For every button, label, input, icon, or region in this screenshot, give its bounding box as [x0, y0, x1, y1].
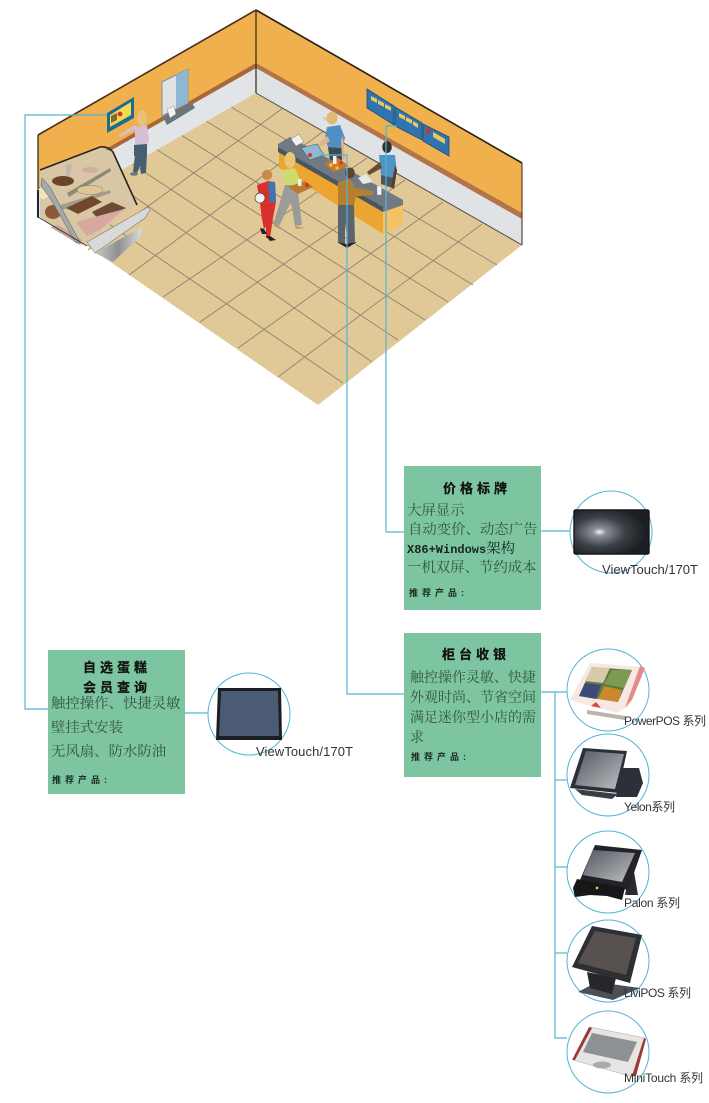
service counter [278, 134, 403, 234]
price board screens [367, 89, 449, 156]
right cashier [367, 141, 397, 189]
pastry panel features: 无风扇、防水防油 [51, 743, 166, 760]
panel: pastry self-service and member lookup [48, 650, 185, 794]
wall menu screen [107, 97, 134, 133]
pastry display case [37, 147, 150, 262]
product: ViewTouch 170T for pastry [208, 673, 353, 759]
product: Palon: Palon 系列 [624, 896, 680, 910]
product: MiniTouch: MiniTouch 系列 [624, 1071, 703, 1085]
counter checkout features [410, 669, 536, 746]
recommended products label: 推荐产品: [409, 587, 468, 598]
heading: pastry and member lookup [83, 660, 151, 695]
product: ViewTouch 170T for pastry: ViewTouch/170T [256, 744, 353, 759]
heading: pastry and member lookup: 自选蛋糕 [83, 660, 151, 675]
pastry panel features: 触控操作、快捷灵敏 [51, 695, 181, 712]
product: LiviPOS [567, 920, 691, 1002]
counter checkout features: 外观时尚、节省空间 [410, 689, 536, 706]
customer at counter [337, 168, 373, 248]
isometric shop scene [37, 10, 522, 405]
pastry panel features [51, 695, 181, 760]
price signage features: 自动变价、动态广告 [408, 521, 538, 538]
product: Palon [567, 831, 680, 913]
left wall [38, 10, 256, 218]
heading: pastry and member lookup: 会员查询 [83, 680, 151, 695]
drinks window and shelf [162, 69, 195, 125]
heading: counter checkout: 柜台收银 [442, 647, 510, 662]
recommended products label: 推荐产品: [411, 751, 470, 762]
product: PowerPOS: PowerPOS 系列 [624, 714, 706, 728]
connector lines [25, 115, 570, 1038]
right wall [256, 10, 522, 245]
product: ViewTouch 170T for price board: ViewTouch/170T [602, 562, 698, 577]
pastry panel features: 壁挂式安装 [51, 719, 123, 736]
product: LiviPOS: LiviPOS 系列 [624, 986, 691, 1000]
product: Yelon: Yelon系列 [624, 800, 675, 814]
counter checkout features: 满足迷你型小店的需 [410, 709, 536, 726]
floor [38, 93, 522, 405]
price signage features: 一机双屏、节约成本 [407, 558, 537, 576]
product: MiniTouch [567, 1011, 703, 1093]
heading: price signage: 价格标牌 [443, 481, 511, 496]
customer at wall screen [119, 110, 149, 176]
price signage features: 大屏显示 [407, 502, 465, 519]
woman with tray [274, 152, 313, 229]
product: PowerPOS [567, 649, 706, 731]
counter checkout features: 求 [410, 729, 424, 746]
boy with ball [255, 170, 276, 241]
counter checkout features: 触控操作灵敏、快捷 [410, 669, 536, 686]
back cashier [315, 112, 345, 162]
price signage features: X86+Windows架构 [407, 539, 515, 557]
price signage features [407, 502, 538, 576]
recommended products label: 推荐产品: [52, 774, 111, 785]
panel: counter checkout [404, 633, 541, 777]
product: Yelon [567, 734, 675, 816]
product: ViewTouch 170T for price board [570, 491, 698, 577]
panel: price signage [404, 466, 541, 610]
